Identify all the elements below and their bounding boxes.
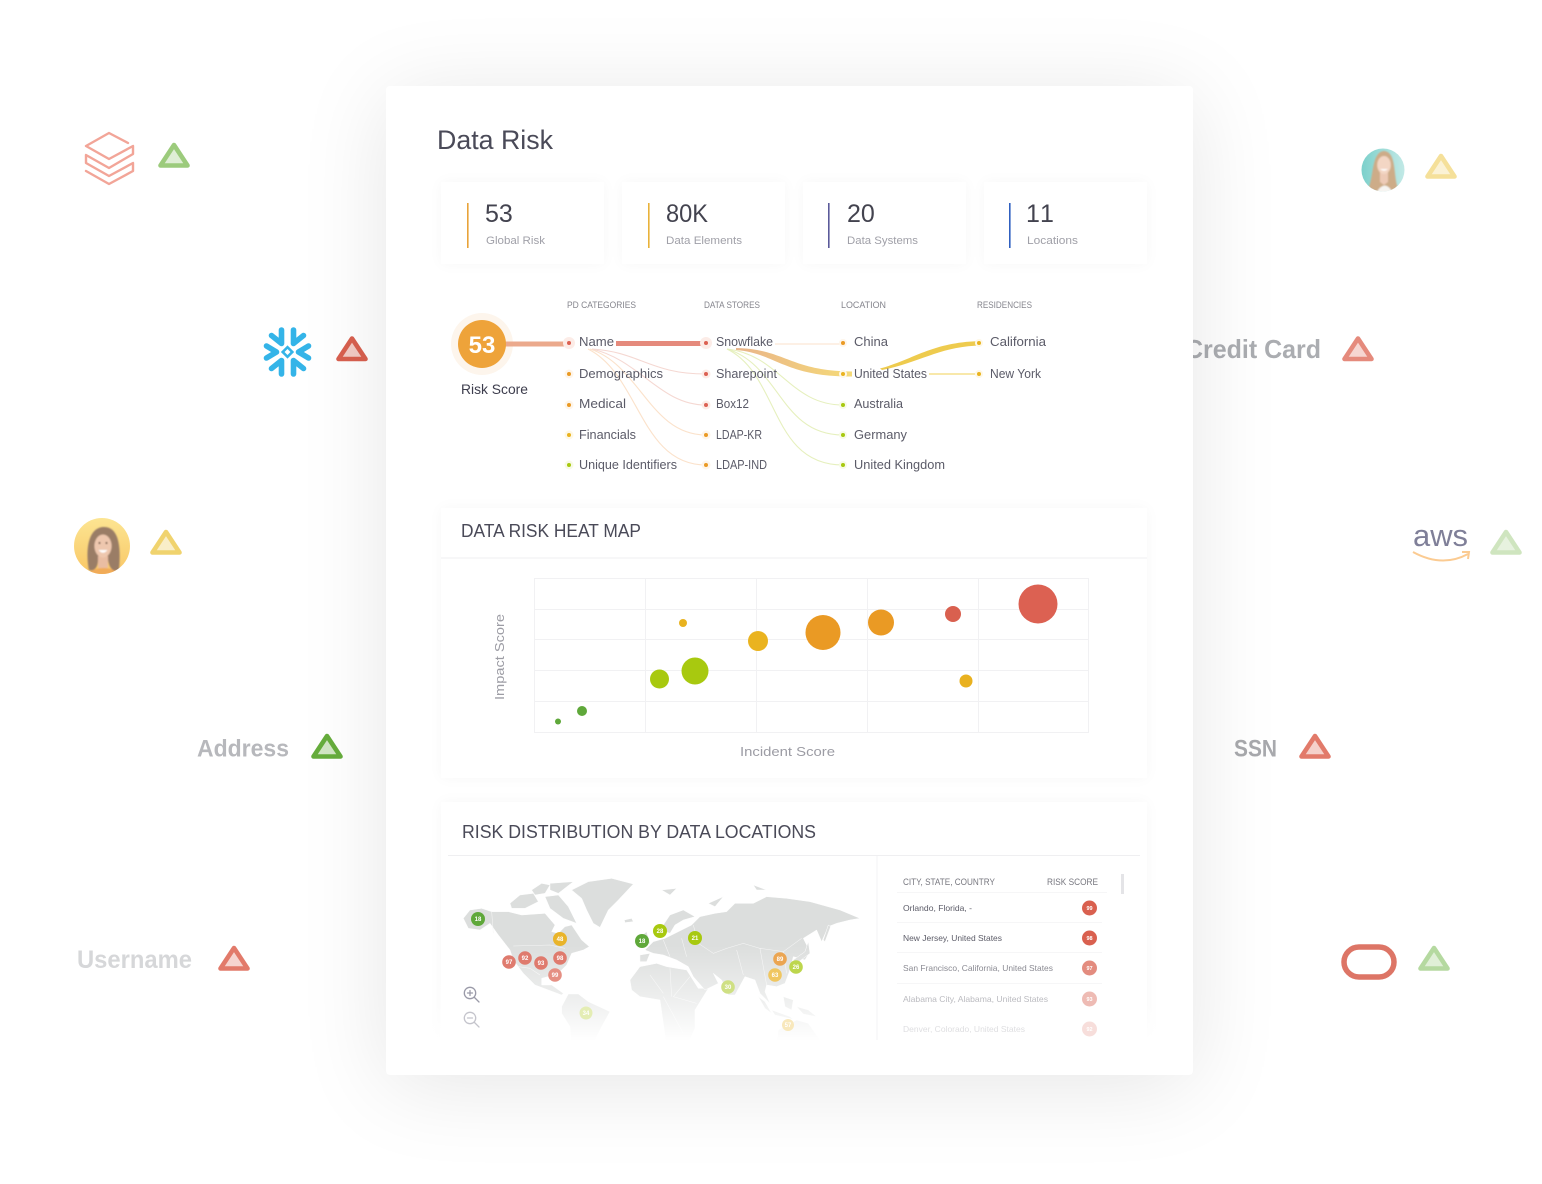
map markers: 21 (692, 936, 699, 942)
table header: RISK SCORE (1047, 877, 1098, 887)
arctic islands (510, 893, 538, 908)
data store labels: Snowflake (716, 335, 773, 349)
row: Alabama City: 93 (1086, 997, 1093, 1003)
label: SSN: SSN (1234, 736, 1277, 762)
row: Orlando: 99 (1086, 906, 1093, 912)
australia (777, 1020, 822, 1047)
russian arctic islands (708, 897, 723, 907)
iceland (624, 918, 633, 923)
flow diagram: risk lineage (451, 300, 1046, 472)
stat: 20 data systems: Data Systems (847, 235, 919, 247)
y axis label: Impact Score (492, 614, 507, 700)
stat: 20 data systems (828, 200, 919, 248)
row: Denver: 92 (1086, 1027, 1093, 1033)
heading: risk distribution: RISK DISTRIBUTION BY DATA LOCATIONS (462, 822, 816, 842)
map markers: 18 (475, 917, 482, 923)
stat: 80K data elements: Data Elements (666, 235, 743, 247)
location labels: Germany (854, 428, 908, 442)
icon: red risk triangle ssn (1302, 736, 1328, 756)
map markers: 98 (557, 956, 564, 962)
stat: 53 global risk: 53 (485, 200, 513, 228)
column headers: DATA STORES (704, 300, 760, 310)
label: Username: Username (77, 946, 192, 974)
label: Address: Address (197, 736, 289, 762)
panel: risk distribution (441, 802, 1147, 1042)
southeast asian islands (758, 997, 772, 1013)
residency labels (990, 335, 1046, 381)
icon: red risk triangle (338, 338, 366, 359)
column headers: PD CATEGORIES (567, 300, 636, 310)
icon: red risk triangle credit card (1344, 338, 1372, 359)
map markers: 63 (772, 973, 779, 979)
row: Alabama City: Alabama City, Alabama, United States (903, 994, 1048, 1004)
stat card: locations (984, 182, 1147, 264)
row: Denver (903, 1022, 1097, 1036)
row: San Francisco (903, 960, 1097, 976)
row: San Francisco: San Francisco, California, United States (903, 963, 1053, 973)
icon: red risk triangle username (220, 948, 248, 968)
stat: 53 global risk: Global Risk (486, 235, 546, 247)
avatar: woman on teal (1362, 148, 1404, 193)
map markers: 48 (557, 937, 564, 943)
map markers: 99 (552, 973, 559, 979)
south america (562, 994, 610, 1047)
data store labels: LDAP-IND (716, 458, 767, 472)
location labels: China (854, 335, 888, 349)
stat card: data elements (622, 182, 785, 264)
british isles (638, 932, 650, 947)
PD category labels: Financials (579, 428, 636, 442)
map markers: 26 (793, 965, 800, 971)
risk score badge: Risk Score (461, 381, 528, 397)
data store labels: LDAP-KR (716, 428, 762, 442)
icon: pale green risk triangle (1492, 532, 1520, 552)
map markers: 92 (522, 956, 529, 962)
icon: zoom in (464, 987, 479, 1002)
map markers: 30 (725, 985, 732, 991)
world map (463, 878, 860, 1047)
table header (903, 877, 1098, 887)
icon: green risk triangle address (314, 736, 340, 756)
japan (793, 942, 810, 963)
PD category labels: Unique Identifiers (579, 458, 677, 472)
icon: snowflake logo (266, 330, 308, 374)
map markers: 97 (506, 960, 513, 966)
stat: 80K data elements: 80K (666, 200, 708, 228)
table header: CITY, STATE, COUNTRY (903, 877, 995, 887)
location labels: United Kingdom (854, 458, 945, 472)
icon: yellow risk triangle left (152, 532, 180, 552)
icon: pale yellow risk triangle (1428, 156, 1454, 176)
stat: 11 locations: Locations (1027, 235, 1079, 247)
column headers: LOCATION (841, 300, 886, 310)
map markers: 18 (639, 939, 646, 945)
new guinea (797, 1007, 817, 1017)
PD category labels: Medical (579, 397, 626, 411)
risk score badge (451, 313, 571, 397)
location labels: Australia (854, 397, 903, 411)
map markers: 57 (785, 1023, 792, 1029)
heading: data risk heat map: DATA RISK HEAT MAP (461, 521, 641, 541)
logo: oracle ring (1344, 947, 1394, 977)
icon: light green risk triangle (1420, 948, 1448, 968)
stat: 53 global risk (467, 200, 546, 248)
stat: 80K data elements (648, 200, 743, 248)
map markers: 34 (583, 1011, 590, 1017)
main dashboard card (386, 86, 1193, 1075)
row: New Jersey: New Jersey, United States (903, 933, 1002, 943)
location labels (854, 335, 945, 472)
data store labels (716, 335, 778, 472)
africa (630, 963, 708, 1047)
scandinavia (660, 910, 695, 933)
stat: 11 locations (1009, 200, 1079, 248)
stat card: global risk (441, 182, 604, 264)
europe and asia (645, 897, 860, 1003)
PD category labels: Name (579, 335, 614, 349)
node dots (563, 337, 983, 470)
risk score badge: 53 (469, 332, 495, 359)
country borders (492, 912, 802, 1033)
flow connectors (588, 341, 982, 465)
PD category labels: Demographics (579, 367, 663, 381)
stat card: data systems (803, 182, 966, 264)
residency labels: New York (990, 367, 1042, 381)
panel side fade (430, 1000, 1160, 1070)
row: Denver: Denver, Colorado, United States (903, 1024, 1025, 1034)
row: New Jersey (903, 930, 1097, 946)
PD category labels (579, 335, 677, 472)
panel: heat map (441, 508, 1147, 778)
sakhalin (823, 925, 831, 942)
stat: 20 data systems: 20 (847, 200, 875, 228)
label: Credit Card: Credit Card (1185, 334, 1321, 364)
map markers: 89 (777, 957, 784, 963)
stat: 11 locations: 11 (1026, 200, 1054, 228)
row: Alabama City (903, 992, 1097, 1006)
residency labels: California (990, 335, 1046, 349)
chart bubbles (555, 584, 1058, 724)
avatar: woman on yellow (74, 518, 130, 576)
column headers: RESIDENCIES (977, 300, 1032, 310)
icon: zoom out (464, 1012, 479, 1027)
row: San Francisco: 97 (1086, 966, 1093, 972)
column headers (567, 300, 1032, 310)
map markers: 93 (538, 961, 545, 967)
bubble chart (492, 578, 1089, 759)
row: Orlando: Orlando, Florida, - (903, 903, 972, 913)
title: Data Risk (437, 125, 553, 155)
logo: aws: aws (1413, 518, 1468, 553)
north america (463, 908, 589, 995)
row: Orlando (903, 900, 1097, 916)
map markers (471, 912, 803, 1031)
data store labels: Box12 (716, 397, 749, 411)
row: New Jersey: 98 (1086, 936, 1093, 942)
iberia (640, 953, 650, 962)
data store labels: Sharepoint (716, 367, 778, 381)
icon: green risk triangle (160, 145, 188, 166)
greenland (572, 878, 633, 927)
x axis label: Incident Score (740, 744, 835, 759)
icon: layered stack logo (86, 133, 133, 184)
location labels: United States (854, 367, 927, 381)
floating source items behind the card (74, 132, 1522, 980)
map markers: 28 (657, 929, 664, 935)
table: city and risk score (897, 874, 1124, 1036)
